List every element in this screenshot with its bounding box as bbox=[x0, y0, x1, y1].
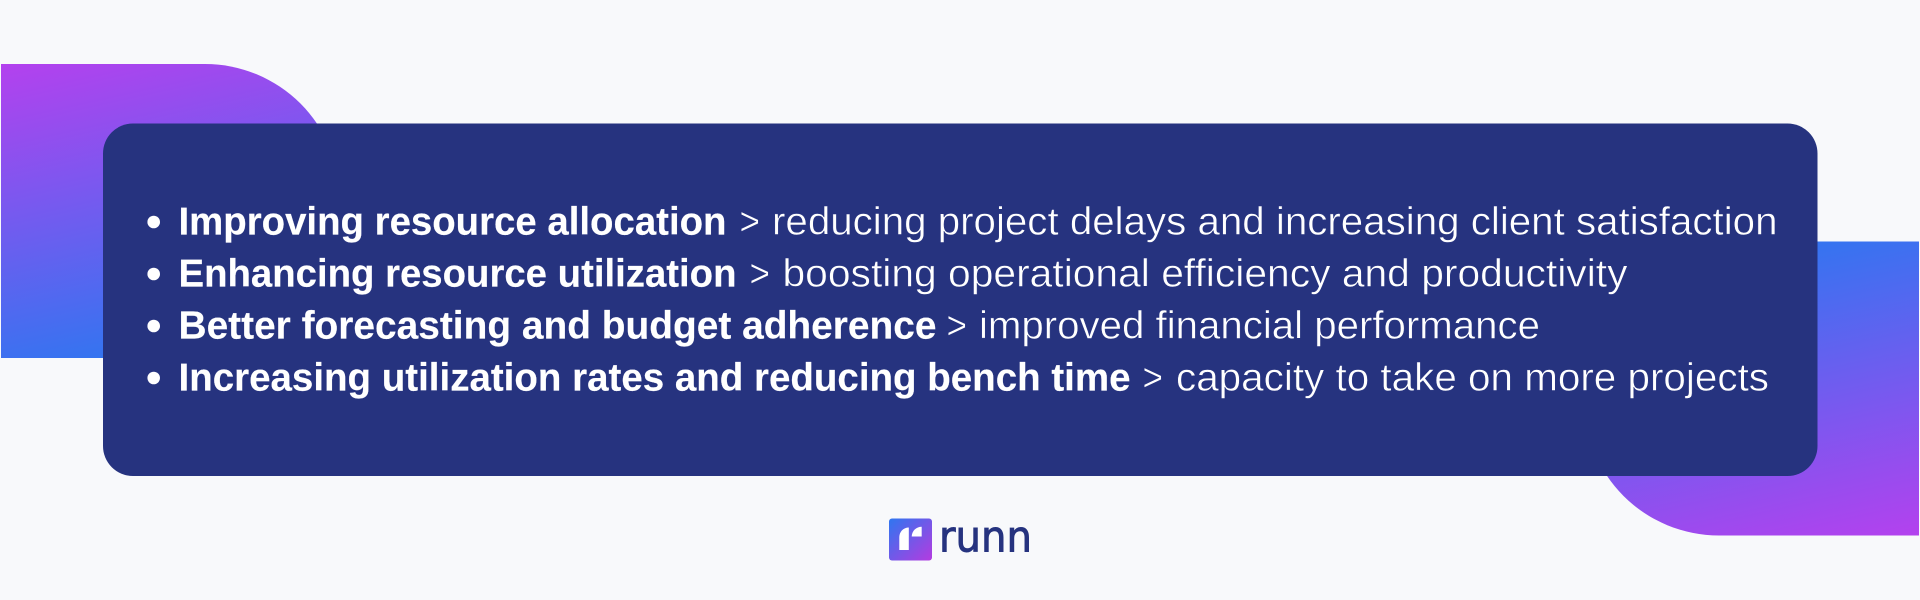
background shape: right gradient bbox=[1584, 242, 1919, 536]
list item: resource allocation: > bbox=[740, 200, 760, 244]
list item: resource allocation: reducing project delays and increasing client satisfaction bbox=[772, 200, 1778, 244]
list item: forecasting and budget: improved financial performance bbox=[979, 304, 1540, 348]
list item: resource utilization: boosting operational efficiency and productivity bbox=[782, 252, 1628, 296]
wordmark: runn bbox=[939, 512, 1032, 562]
background shape: left gradient bbox=[1, 64, 340, 358]
list item: forecasting and budget: > bbox=[946, 304, 967, 348]
list item: forecasting and budget: Better forecasting and budget adherence bbox=[178, 304, 936, 348]
list item: utilization rates and bench time: > bbox=[1142, 356, 1163, 400]
list item: resource utilization: > bbox=[750, 252, 770, 296]
panel: benefits list bbox=[103, 124, 1818, 476]
list item: forecasting and budget bbox=[147, 304, 1540, 348]
icon: runn mark bbox=[889, 518, 932, 560]
list item: resource allocation: Improving resource allocation bbox=[178, 200, 726, 244]
list item: utilization rates and bench time: capacity to take on more projects bbox=[1176, 356, 1769, 400]
list item: resource allocation bbox=[147, 200, 1777, 244]
list item: resource utilization: Enhancing resource utilization bbox=[178, 252, 736, 296]
list item: resource utilization bbox=[147, 252, 1628, 296]
list item: utilization rates and bench time bbox=[147, 356, 1769, 400]
logo: runn bbox=[889, 512, 1032, 562]
list item: utilization rates and bench time: Increasing utilization rates and reducing bench time bbox=[178, 356, 1130, 400]
